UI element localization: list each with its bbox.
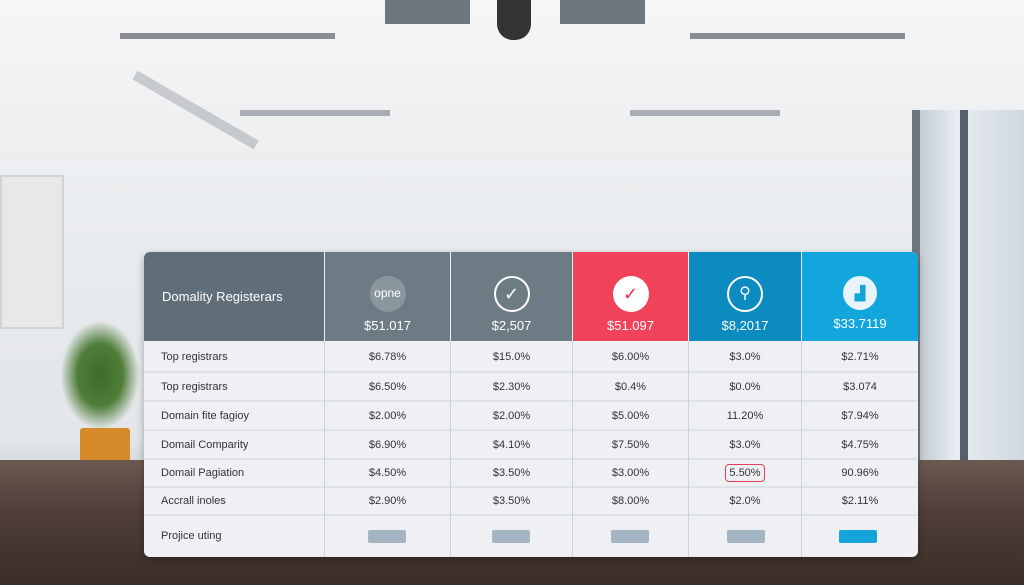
row labels and values: $4.10% [493,438,530,450]
row labels and values: $2.90% [369,495,406,507]
comparison table [144,252,918,557]
header col 3 [573,252,688,341]
row labels and values: $2.30% [493,380,530,392]
header col 2: $2,507 [492,318,531,333]
row labels and values: 11.20% [727,410,763,422]
row labels and values: $3.074 [843,380,877,392]
row labels and values: $2.00% [369,410,406,422]
table body [144,341,918,557]
row labels and values: $3.00% [612,467,649,479]
row labels and values [161,350,879,542]
header col 3: ✓ [623,284,638,304]
row labels and values: $3.0% [729,438,761,450]
header col 5: ▟ [855,285,865,301]
row labels and values: $3.50% [493,495,530,507]
row labels and values: $2.00% [493,410,530,422]
header row [144,252,918,341]
row labels and values: Domain fite fagioy [161,410,249,422]
header col 4: ⚲ [739,285,751,302]
row labels and values: $3.50% [493,467,530,479]
row labels and values: $2.71% [841,350,879,362]
header col 4 [689,252,801,341]
row labels and values: $6.00% [612,350,649,362]
left frame [0,175,64,329]
buttons row [368,530,877,543]
ceiling [0,0,1024,160]
row labels and values: $2.0% [729,495,761,507]
row labels and values: $7.94% [841,410,879,422]
header col 4: $8,2017 [722,318,768,333]
plant [60,320,140,430]
header title [144,252,324,341]
row labels and values: Accrall inoles [161,495,226,507]
row labels and values: Top registrars [161,380,228,392]
header col 1 [325,252,450,341]
row labels and values: $4.75% [841,438,879,450]
row labels and values: Domail Comparity [161,438,248,450]
row labels and values: $15.0% [493,350,530,362]
header col 2 [451,252,572,341]
row labels and values: Domail Pagiation [161,467,244,479]
row labels and values: Top registrars [161,350,228,362]
row labels and values: $3.0% [729,350,761,362]
highlighted cell: 5.50% [729,467,761,479]
row labels and values: 90.96% [841,467,879,479]
row labels and values: $8.00% [612,495,649,507]
row labels and values: $6.78% [369,350,406,362]
header col 2: ✓ [504,284,519,304]
header title: Domality Registerars [162,289,283,304]
row labels and values: $6.90% [369,438,406,450]
row labels and values: $0.4% [615,380,646,392]
row labels and values: $6.50% [369,380,406,392]
header col 3: $51.097 [607,318,654,333]
row labels and values: $7.50% [612,438,649,450]
header col 1: opne [374,286,401,300]
row labels and values: Projice uting [161,530,222,542]
header col 1: $51.017 [364,318,411,333]
row labels and values: $0.0% [729,380,761,392]
row labels and values: $2.11% [842,495,878,507]
header col 5 [802,252,918,341]
row labels and values: $4.50% [369,467,406,479]
header col 5: $33.7119 [833,316,887,331]
row labels and values: $5.00% [612,410,649,422]
floor/table [0,460,1024,585]
window right [912,110,1024,460]
